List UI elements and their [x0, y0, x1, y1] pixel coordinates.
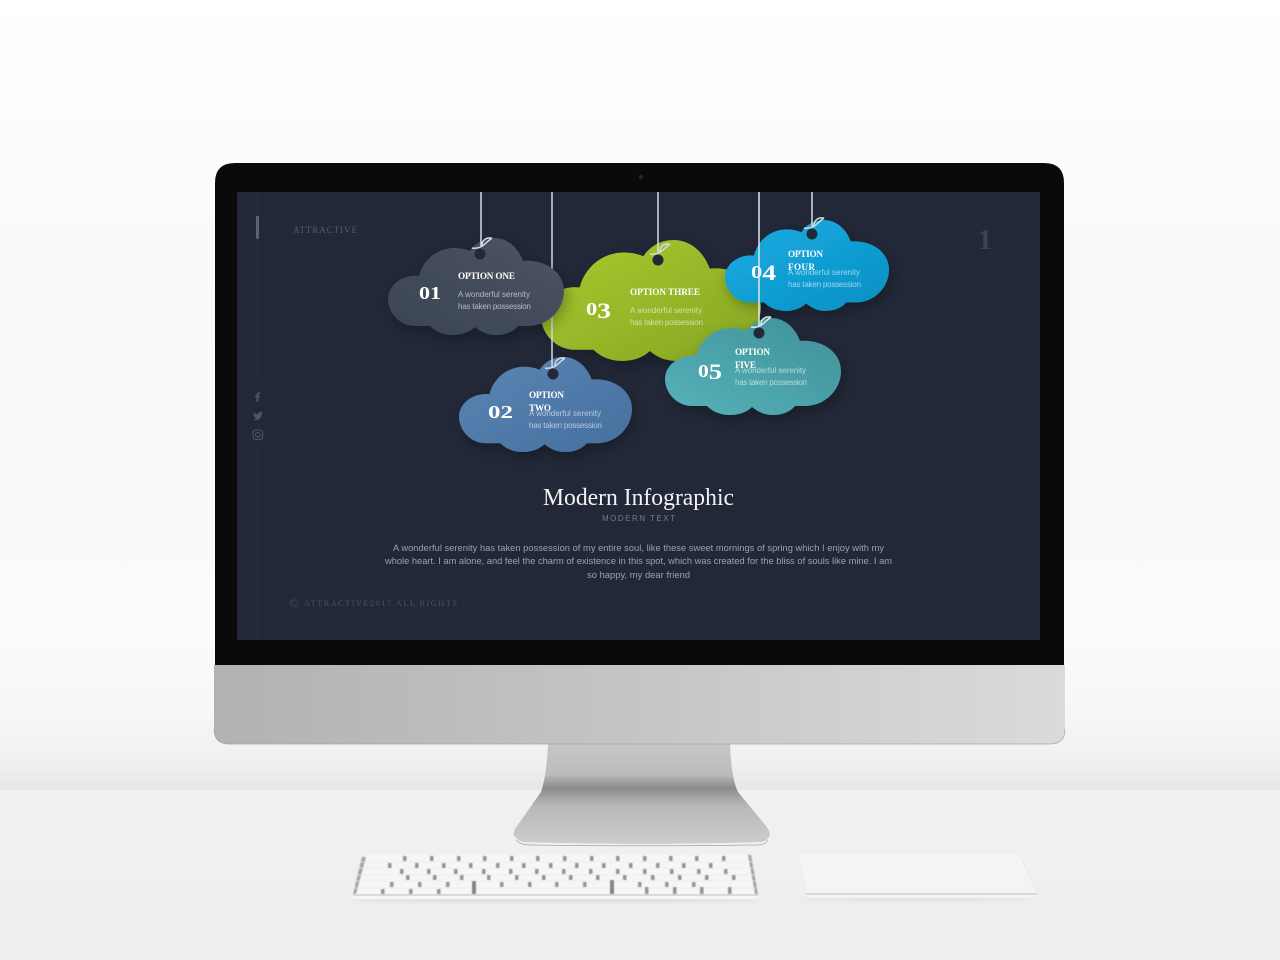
copyright — [289, 595, 457, 610]
hanger hole — [548, 368, 558, 380]
cloud 01 — [388, 192, 564, 335]
keyboard body — [352, 855, 758, 899]
string — [472, 192, 492, 248]
cloud 04 — [725, 192, 889, 311]
keyboard key gaps — [352, 855, 758, 894]
paragraph — [384, 543, 892, 580]
paragraph: A wonderful serenity has taken possession of my entire soul, like these sweet mornings of spring which I enjoy with my — [393, 543, 884, 553]
icon: twitter — [253, 412, 263, 420]
description — [630, 306, 703, 327]
description: A wonderful serenity — [529, 409, 601, 418]
number: 5 — [709, 359, 722, 384]
icon: instagram — [253, 430, 263, 440]
title: Modern Infographic — [543, 485, 734, 511]
cloud 03 — [541, 192, 761, 361]
number: 02 — [488, 402, 513, 422]
number: 0 — [698, 361, 707, 381]
description: A wonderful serenity — [458, 290, 530, 299]
option title: FIVE — [735, 360, 756, 370]
description: A wonderful serenity — [735, 366, 806, 375]
string — [650, 192, 670, 254]
option title: OPTION ONE — [458, 271, 515, 281]
cloud 02 — [459, 192, 632, 452]
option title: OPTION — [735, 347, 770, 357]
floor background — [0, 790, 1280, 960]
description: has taken possession — [788, 280, 861, 289]
camera dot — [639, 175, 643, 179]
keyboard — [350, 855, 760, 902]
icon: facebook — [255, 392, 260, 402]
monitor chin — [214, 665, 1065, 744]
description — [458, 290, 531, 311]
trackpad — [797, 853, 1037, 900]
option title: TWO — [529, 403, 551, 413]
description: has taken possession — [458, 302, 531, 311]
hanger hole — [474, 248, 486, 260]
copyright: © — [289, 595, 299, 610]
hanger hole — [754, 328, 764, 338]
number: 0 — [751, 262, 760, 282]
number: 3 — [597, 298, 611, 323]
description: A wonderful serenity — [630, 306, 702, 315]
option title: OPTION — [788, 249, 823, 259]
string — [545, 192, 565, 368]
description: has taken possession — [630, 318, 703, 327]
description — [529, 409, 602, 430]
number: 01 — [419, 283, 441, 303]
brand label: ATTRACTIVE — [293, 225, 358, 235]
paragraph: whole heart. I am alone, and feel the charm of existence in this spot, which was created for the bliss of souls like mine. I am — [384, 556, 892, 566]
number: 0 — [586, 299, 595, 319]
monitor body — [214, 163, 1065, 744]
cloud 05 — [665, 192, 841, 415]
monitor bezel — [215, 163, 1064, 665]
option title — [529, 390, 564, 413]
string — [751, 192, 771, 327]
description: A wonderful serenity — [788, 268, 860, 277]
paragraph: so happy, my dear friend — [587, 570, 690, 580]
sidebar marker — [256, 216, 259, 239]
description — [788, 268, 861, 289]
hanger hole — [652, 254, 664, 266]
subtitle: MODERN TEXT — [602, 514, 675, 523]
screen — [237, 192, 1040, 640]
hanger hole — [806, 228, 818, 240]
option title — [788, 249, 823, 272]
sidebar line — [257, 192, 259, 640]
copyright: ATTRACTIVE2017.ALL RIGHTS — [304, 598, 457, 608]
monitor stand — [514, 744, 770, 846]
option title: FOUR — [788, 262, 815, 272]
option title — [735, 347, 770, 370]
page number: 1 — [978, 224, 992, 256]
description: has taken possession — [529, 421, 602, 430]
string — [804, 192, 824, 228]
number: 4 — [762, 260, 776, 285]
description: has taken possession — [735, 378, 807, 387]
option title: OPTION THREE — [630, 287, 700, 297]
option title: OPTION — [529, 390, 564, 400]
description — [735, 366, 807, 387]
